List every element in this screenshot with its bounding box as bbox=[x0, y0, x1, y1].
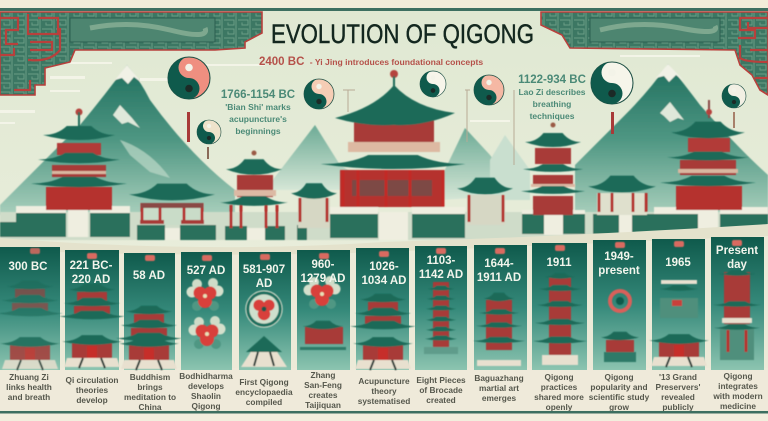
panel: 581-907 AD: compiled bbox=[246, 397, 282, 407]
panel: 58 AD: China bbox=[138, 402, 162, 412]
panel: 1965: Preservers' bbox=[656, 382, 700, 392]
panel: 1911 bbox=[532, 243, 587, 412]
panel: present day: day bbox=[727, 259, 748, 271]
timeline note: 1766-1154 BC: 'Bian Shi' marks bbox=[225, 102, 291, 112]
panel: 527 AD: Shaolin bbox=[191, 391, 221, 401]
panel: 1026-1034 AD bbox=[350, 248, 416, 406]
panel: 58 AD: meditation to bbox=[124, 392, 176, 402]
palace scene bbox=[0, 70, 768, 240]
panel: 1965: 1965 bbox=[665, 257, 691, 269]
panel: 960-1279 AD: creates bbox=[308, 390, 338, 400]
panel: 1965 bbox=[649, 239, 709, 412]
panel: 1949-present bbox=[589, 240, 650, 412]
mountains: background range bbox=[0, 64, 768, 215]
ornament: top-left panel bbox=[0, 12, 262, 95]
panel: 581-907 AD: AD bbox=[256, 278, 272, 290]
panel: 300 BC bbox=[0, 247, 63, 402]
timeline note: 1766-1154 BC: beginnings bbox=[235, 126, 281, 136]
hall: 172 bbox=[129, 184, 215, 225]
panel: 221 BC-220 AD: 221 BC- bbox=[70, 260, 113, 272]
pagoda: centre palace bbox=[320, 70, 466, 207]
panel: 1965: '13 Grand bbox=[659, 372, 697, 382]
panel: 1911: practices bbox=[541, 382, 578, 392]
mountain: left peak bbox=[0, 65, 235, 215]
panel: 1644-1911 AD: emerges bbox=[482, 393, 516, 403]
panel: 221 BC-220 AD: theories bbox=[76, 385, 109, 395]
panel: 960-1279 AD: Zhang bbox=[311, 370, 335, 380]
panel: 1949-present: Qigong bbox=[604, 372, 634, 382]
wall and terrace base bbox=[0, 206, 768, 240]
panel: 58 AD: 58 AD bbox=[133, 270, 165, 282]
panel: 527 AD: develops bbox=[188, 381, 224, 391]
title: EVOLUTION OF QIGONG bbox=[271, 19, 534, 49]
panel: 581-907 AD: 581-907 bbox=[243, 264, 285, 276]
panel: 58 AD: Buddhism bbox=[130, 372, 170, 382]
panel: present day bbox=[711, 237, 764, 411]
panel: 1949-present: 1949- bbox=[604, 251, 634, 263]
hall: 485 bbox=[457, 178, 513, 225]
timeline note: 1122-934 BC: breathing bbox=[533, 99, 571, 109]
panel: 221 BC-220 AD: Qi circulation bbox=[65, 375, 119, 385]
panel: 527 AD: 527 AD bbox=[187, 265, 225, 277]
panel: 1949-present: popularity and bbox=[590, 382, 648, 392]
panel: 527 AD: Bodhidharma bbox=[179, 371, 233, 381]
panel: 1644-1911 AD: 1644- bbox=[484, 258, 514, 270]
panel: 1026-1034 AD: 1034 AD bbox=[362, 275, 406, 287]
timeline note: 1122-934 BC: Lao Zi describes bbox=[518, 87, 586, 97]
timeline note: 2400 BC: 2400 BC - Yi Jing introduces foundational concepts bbox=[259, 56, 483, 68]
timeline note: 1122-934 BC: 1122-934 BC bbox=[518, 74, 586, 86]
timeline note: 1122-934 BC: techniques bbox=[530, 111, 575, 121]
panel: 960-1279 AD bbox=[297, 250, 350, 410]
panel: 58 AD bbox=[116, 253, 182, 412]
panel: 1911: shared more bbox=[534, 392, 584, 402]
panel: 1103-1142 AD: 1142 AD bbox=[419, 269, 463, 281]
panel: 1644-1911 AD: Baguazhang bbox=[474, 373, 524, 383]
timeline note: 1122-934 BC bbox=[518, 74, 586, 121]
panel: 1103-1142 AD: created bbox=[426, 395, 456, 405]
panel: 221 BC-220 AD: develop bbox=[76, 395, 108, 405]
panel: 581-907 AD: encyclopaedia bbox=[235, 387, 293, 397]
panel: 960-1279 AD: 960- bbox=[311, 259, 335, 271]
panel: 960-1279 AD: San-Feng bbox=[304, 380, 342, 390]
panel: 1911: Qigong bbox=[544, 372, 574, 382]
panel: 581-907 AD bbox=[235, 252, 293, 407]
panel: 1911: openly bbox=[546, 402, 573, 412]
panel: 960-1279 AD: Taijiquan bbox=[305, 400, 341, 410]
caption background bbox=[0, 368, 768, 410]
panel: 221 BC-220 AD: 220 AD bbox=[72, 274, 110, 286]
pagoda: 255 bbox=[220, 150, 288, 228]
pagoda: left bbox=[31, 108, 127, 210]
panel: 1949-present: present bbox=[598, 265, 640, 277]
pagoda: right bbox=[660, 100, 756, 210]
panel: 1026-1034 AD: theory bbox=[371, 386, 397, 396]
ground band bbox=[0, 224, 768, 421]
panel: present day: Qigong bbox=[723, 371, 753, 381]
panel: 1103-1142 AD: Eight Pieces bbox=[416, 375, 466, 385]
panel: 300 BC: 300 BC bbox=[8, 261, 48, 273]
panel: present day: with modern bbox=[712, 391, 763, 401]
timeline note: 1766-1154 BC: acupuncture's bbox=[229, 114, 287, 124]
panel: 1949-present: scientific study bbox=[589, 392, 650, 402]
panel: 300 BC: links health bbox=[6, 382, 52, 392]
clouds bbox=[0, 55, 700, 124]
panel: 1026-1034 AD: 1026- bbox=[369, 261, 399, 273]
panel: 1911: 1911 bbox=[547, 257, 572, 269]
panel: 1103-1142 AD bbox=[415, 246, 467, 405]
panel: 1103-1142 AD: of Brocade bbox=[419, 385, 463, 395]
panel: 1026-1034 AD: Acupuncture bbox=[358, 376, 410, 386]
panel: 1644-1911 AD: martial art bbox=[479, 383, 519, 393]
panel: 1965: revealed bbox=[661, 392, 695, 402]
panel: 1644-1911 AD bbox=[473, 245, 527, 403]
panel: 527 AD: Qigong bbox=[191, 401, 221, 411]
panel: 1949-present: grow bbox=[609, 402, 629, 412]
timeline note: 1766-1154 BC: 1766-1154 BC bbox=[221, 89, 295, 101]
panel: 1965: publicly bbox=[662, 402, 694, 412]
panel: present day: Present bbox=[716, 245, 758, 257]
ornament: top-right panel bbox=[541, 12, 768, 95]
panel: 527 AD bbox=[179, 252, 233, 411]
timeline note: 1766-1154 BC bbox=[221, 89, 295, 136]
panel: 300 BC: and breath bbox=[8, 392, 50, 402]
panel: 300 BC: Zhuang Zi bbox=[9, 372, 49, 382]
panel: 221 BC-220 AD bbox=[59, 250, 125, 405]
panel: 581-907 AD: First Qigong bbox=[239, 377, 289, 387]
panel: 1103-1142 AD: 1103- bbox=[427, 255, 456, 267]
panel: 1644-1911 AD: 1911 AD bbox=[477, 272, 521, 284]
bottom border bbox=[0, 411, 768, 414]
icon: yin-yang symbols bbox=[168, 57, 746, 165]
panel: 58 AD: brings bbox=[137, 382, 163, 392]
panel: 1026-1034 AD: systematised bbox=[358, 396, 410, 406]
panel: present day: medicine bbox=[720, 401, 756, 411]
top cream strip bbox=[0, 0, 768, 8]
pagoda: 553 bbox=[521, 122, 585, 215]
hall: 622 bbox=[588, 176, 656, 215]
panel: 960-1279 AD: 1279 AD bbox=[301, 273, 345, 285]
hall: 314 bbox=[291, 183, 337, 228]
mountain: right peak bbox=[575, 64, 768, 215]
panel: present day: integrates bbox=[718, 381, 758, 391]
